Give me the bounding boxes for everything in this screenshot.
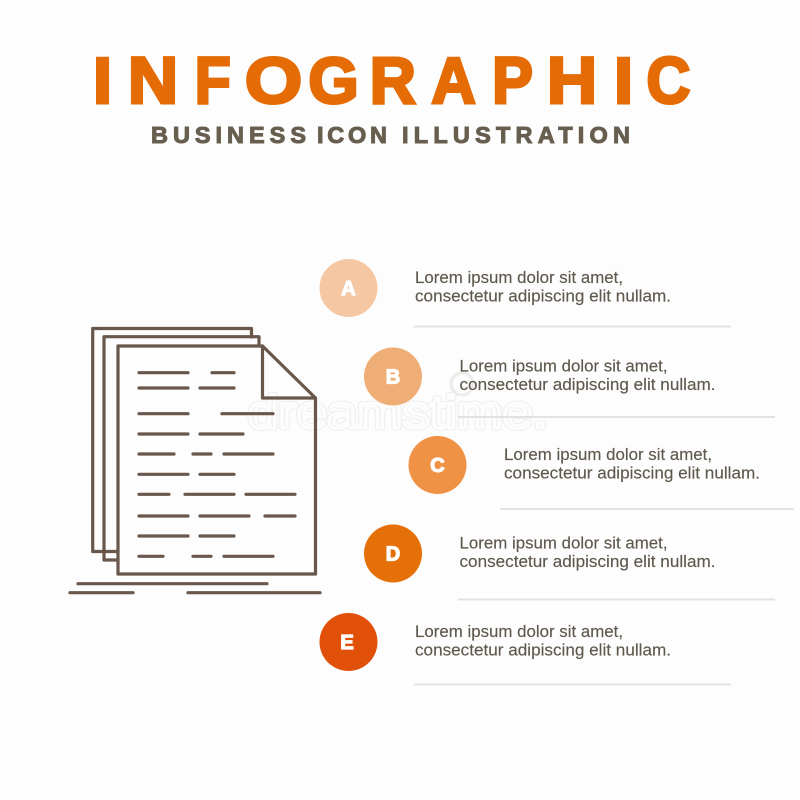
badge C: C: [430, 455, 445, 477]
text B: Lorem ipsum dolor sit amet,: [460, 358, 668, 376]
icon: code document pages: [70, 328, 320, 593]
step B: [364, 348, 775, 417]
badge C: [408, 436, 466, 494]
title: R: [370, 43, 416, 117]
text C: Lorem ipsum dolor sit amet,: [504, 446, 712, 464]
subtitle: ICON: [317, 122, 387, 148]
badge A: A: [341, 278, 356, 300]
text A: [415, 269, 671, 306]
title: N: [128, 45, 178, 117]
badge E: [320, 613, 378, 671]
text A: Lorem ipsum dolor sit amet,: [415, 269, 623, 287]
badge E: E: [340, 632, 354, 654]
title: G: [308, 44, 359, 117]
badge D: D: [386, 544, 400, 566]
title: C: [647, 45, 690, 117]
front page: [118, 346, 316, 574]
title: I: [93, 44, 112, 117]
title: I: [614, 44, 633, 117]
badge B: [364, 348, 422, 406]
text C: [504, 446, 760, 482]
watermark: dreamstime.: [248, 386, 548, 438]
title: [93, 43, 690, 118]
text E: [415, 623, 671, 660]
text E: consectetur adipiscing elit nullam.: [415, 642, 671, 660]
subtitle: BUSINESS: [151, 122, 306, 148]
subtitle: ILLUSTRATION: [402, 122, 630, 148]
subtitle: [151, 122, 630, 148]
badge A: [320, 259, 378, 317]
badge B: B: [386, 366, 400, 388]
step D: [364, 524, 775, 600]
text C: consectetur adipiscing elit nullam.: [504, 464, 760, 482]
title: P: [492, 45, 533, 117]
step C: [408, 436, 794, 509]
step E: [320, 613, 731, 684]
ground lines: [70, 584, 320, 593]
watermark: [248, 373, 548, 438]
step A: [320, 259, 731, 326]
watermark: dreamstime.: [248, 386, 548, 438]
back page: [93, 328, 252, 552]
title: F: [195, 45, 231, 118]
title: H: [547, 45, 597, 117]
text A: consectetur adipiscing elit nullam.: [415, 288, 671, 306]
text B: [460, 358, 716, 394]
badge D: [364, 524, 422, 582]
text D: [460, 534, 716, 571]
title: O: [245, 44, 302, 117]
middle page: [104, 337, 259, 560]
text B: consectetur adipiscing elit nullam.: [460, 376, 716, 394]
text D: Lorem ipsum dolor sit amet,: [460, 534, 668, 552]
text E: Lorem ipsum dolor sit amet,: [415, 623, 623, 641]
code lines: [139, 373, 295, 556]
title: A: [431, 45, 476, 117]
text D: consectetur adipiscing elit nullam.: [460, 553, 716, 571]
